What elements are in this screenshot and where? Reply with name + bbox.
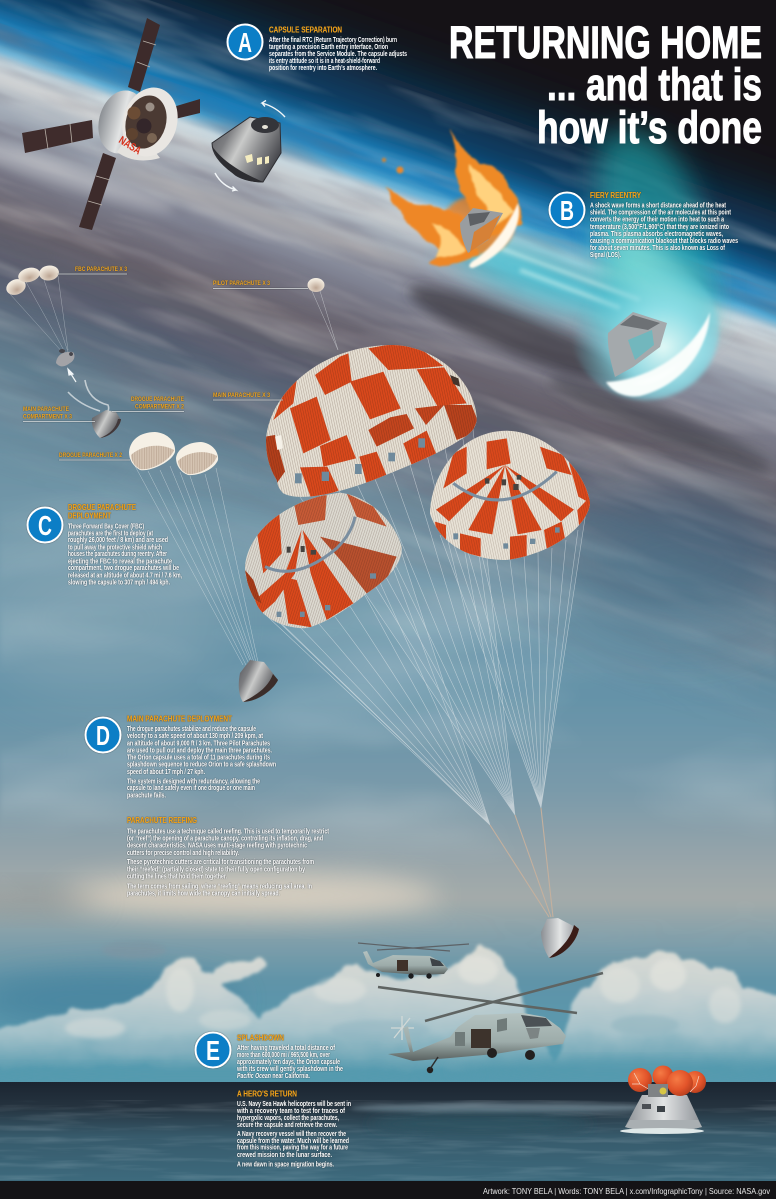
panel C: drogue parachute deployment <box>28 502 182 586</box>
heading C: DEPLOYMENT <box>68 510 112 520</box>
parachute: main canopy right <box>427 427 593 563</box>
label: drogue parachute compartment <box>112 396 184 412</box>
body hero's return: crewed mission to the lunar surface. <box>237 1152 332 1159</box>
body hero's return: from this mission, paving the way for a future <box>237 1144 348 1152</box>
body D: The drogue parachutes stabilize and reduce the capsule <box>127 726 256 733</box>
arrow: rotation lower <box>215 173 236 191</box>
heading A: CAPSULE SEPARATION <box>269 24 342 34</box>
body E <box>236 1045 343 1080</box>
body reefing: The parachutes use a technique called reefing. This is used to temporarily restrict <box>127 828 330 835</box>
badge B <box>550 192 584 228</box>
badge C: C <box>38 510 52 541</box>
body hero's return: A Navy recovery vessel will then recover the <box>237 1131 346 1138</box>
body reefing: parachutes, it limits how wide the canopy can initially spread. <box>127 891 280 898</box>
body hero's return: hypergolic vapors, collect the parachutes, <box>237 1115 339 1122</box>
heading reefing: PARACHUTE REEFING <box>127 815 197 825</box>
badge B: B <box>560 195 574 226</box>
body B: converts the energy of their motion into heat to such a <box>590 217 724 224</box>
body hero's return: A new dawn in space migration begins. <box>237 1162 334 1169</box>
reentry plasma trail <box>443 132 716 372</box>
icon: separated capsule and rotation arrows <box>212 100 285 191</box>
icon: Orion spacecraft with solar arrays <box>22 18 200 230</box>
badge A <box>228 24 262 60</box>
title <box>449 17 762 153</box>
icon: small helicopter <box>358 943 469 979</box>
badge E: E <box>206 1035 220 1066</box>
footer credits <box>0 1181 776 1199</box>
sea <box>0 1082 776 1182</box>
icon: Orion spacecraft with solar arrays: NASA <box>116 134 143 157</box>
body A: After the final RTC (Return Trajectory Correction) burn <box>269 37 397 44</box>
body D: an altitude of about 9,000 ft / 3 km. Three Pilot Parachutes <box>127 740 270 747</box>
icon: splashdown capsule with flotation balloons <box>620 1066 706 1134</box>
label: pilot parachute <box>213 280 308 288</box>
body C <box>68 523 182 586</box>
body hero's return: secure the capsule and retrieve the crew. <box>237 1122 337 1129</box>
parachute: main canopy left <box>240 490 407 630</box>
body B: Signal (LOS). <box>590 252 621 259</box>
label: main parachute: MAIN PARACHUTE X 3 <box>213 392 270 399</box>
body A: its entry attitude so it is in a heat-shield-forward <box>269 58 380 65</box>
body reefing: (or “reef”) the opening of a parachute canopy, controlling its inflation, drag, and <box>127 836 323 842</box>
body A <box>269 37 407 72</box>
body C: roughly 26,000 feet / 8 km) and are used <box>68 537 168 544</box>
body E: After having traveled a total distance of <box>237 1045 336 1052</box>
body C: to pull away the protective shield which <box>68 544 162 551</box>
label: drogue parachute compartment: COMPARTMENT X 2 <box>135 403 184 410</box>
pilot parachute <box>308 278 338 350</box>
body D: are used to pull out and deploy the main three parachutes. <box>127 748 272 754</box>
body B: for about seven minutes. This is also known as Loss of <box>590 245 726 252</box>
panel A: capsule separation <box>228 24 407 72</box>
icon: fireball capsule <box>382 130 522 268</box>
label: main parachute compartment: COMPARTMENT X 3 <box>23 413 72 420</box>
body C: houses the parachutes during reentry. After <box>68 551 167 558</box>
body hero's return: U.S. Navy Sea Hawk helicopters will be sent in <box>237 1101 351 1108</box>
body D: The system is designed with redundancy, allowing the <box>127 778 260 785</box>
arrow: rotation upper <box>262 100 285 117</box>
body A: targeting a precision Earth entry interface, Orion <box>269 44 388 51</box>
parachute: main canopy top <box>266 345 477 497</box>
body E: more than 600,000 mi / 965,500 km, over <box>237 1052 330 1059</box>
drogue parachutes with lines <box>129 432 258 665</box>
body B <box>590 203 738 259</box>
heading C <box>68 502 136 520</box>
panel B: fiery reentry <box>550 190 738 259</box>
body E: Pacific Ocean near California. <box>237 1073 310 1080</box>
clouds above the sea <box>0 945 776 1082</box>
body reefing: The term comes from sailing, where “reefing” means reducing sail area. In <box>127 883 312 890</box>
label: FBC parachute: FBC PARACHUTE X 3 <box>75 266 127 273</box>
label: main parachute compartment: MAIN PARACHUTE <box>23 406 69 413</box>
body E: with its crew will gently splashdown in the <box>236 1066 343 1073</box>
body C: released at an altitude of about 4.7 mi / 7.6 km, <box>68 572 182 580</box>
body B: temperature (3,500°F/1,900°C) that they are ionized into <box>590 223 729 231</box>
FBC parachutes and capsule <box>4 264 76 382</box>
icon: large helicopter <box>378 973 603 1073</box>
label: main parachute compartment <box>23 406 95 422</box>
body D: The Orion capsule uses a total of 11 parachutes during its <box>127 754 270 761</box>
badge E <box>196 1032 230 1068</box>
heading C: DROGUE PARACHUTE <box>68 502 136 512</box>
body reefing: cutters for precise control and high reliability. <box>127 850 239 857</box>
badge C <box>28 508 62 542</box>
badge A: A <box>238 27 252 58</box>
body hero's return <box>236 1101 351 1169</box>
panel: a hero's return <box>236 1088 351 1169</box>
body D: splashdown sequence to reduce Orion to a safe splashdown <box>127 762 276 768</box>
label: pilot parachute: PILOT PARACHUTE X 3 <box>213 280 270 287</box>
body C: parachutes are the first to deploy (at <box>68 530 153 537</box>
body C: Three Forward Bay Cover (FBC) <box>68 523 144 530</box>
arrow: up to FBC capsule <box>68 369 76 382</box>
body D: capsule to land safely even if one drogue or one main <box>127 785 255 792</box>
body reefing: cutting the lines that hold them together. <box>127 874 227 880</box>
body B: A shock wave forms a short distance ahead of the heat <box>590 203 727 210</box>
body reefing <box>127 828 330 898</box>
body C: compartment, two drogue parachutes will be <box>68 565 179 572</box>
suspension lines <box>258 420 587 917</box>
body E: approximately ten days, the Orion capsule <box>237 1059 340 1066</box>
callout labels <box>23 266 308 460</box>
body D <box>127 726 276 799</box>
icon: capsule under main parachutes <box>541 918 579 958</box>
body D: parachute fails. <box>127 792 166 799</box>
heading E: SPLASHDOWN <box>237 1032 284 1042</box>
body reefing: their “reefed” (partially closed) state to their fully open configuration by <box>127 866 305 874</box>
heading hero's return: A HERO’S RETURN <box>237 1088 297 1098</box>
panel D: main parachute deployment <box>86 714 276 799</box>
body reefing: These pyrotechnic cutters are critical for transitioning the parachutes from <box>127 859 314 866</box>
body B: plasma. This plasma absorbs electromagnetic waves, <box>590 231 723 238</box>
heading B: FIERY REENTRY <box>590 190 641 200</box>
capsule with smoke trails <box>68 380 121 438</box>
badge D: D <box>96 720 110 751</box>
body C: slowing the capsule to 307 mph / 494 kph. <box>68 579 170 586</box>
body hero's return: capsule from the water. Much will be learned <box>237 1138 349 1145</box>
panel E: splashdown <box>196 1032 343 1080</box>
body C: ejecting the FBC to reveal the parachute <box>68 558 172 565</box>
body A: position for reentry into Earth’s atmosphere. <box>269 65 377 72</box>
label: drogue parachute: DROGUE PARACHUTE X 2 <box>59 452 122 459</box>
body D: velocity to a safe speed of about 130 mph / 209 kpm, at <box>127 733 264 740</box>
label: FBC parachute <box>58 266 127 274</box>
icon: capsule under drogues <box>239 660 278 702</box>
body reefing: descent characteristics. NASA uses multi-stage reefing with pyrotechnic <box>127 842 307 850</box>
body B: shield. The compression of the air molecules at this point <box>590 210 732 216</box>
icon: Orion capsule with plasma glow <box>571 260 719 400</box>
body hero's return: with a recovery team to test for traces of <box>236 1108 346 1115</box>
body A: separates from the Service Module. The capsule adjusts <box>269 51 407 58</box>
heading D: MAIN PARACHUTE DEPLOYMENT <box>127 714 233 724</box>
badge D <box>86 718 120 752</box>
body D: speed of about 17 mph / 27 kph. <box>127 769 205 776</box>
label: drogue parachute compartment: DROGUE PARACHUTE <box>131 396 184 403</box>
panel: parachute reefing <box>127 815 330 898</box>
